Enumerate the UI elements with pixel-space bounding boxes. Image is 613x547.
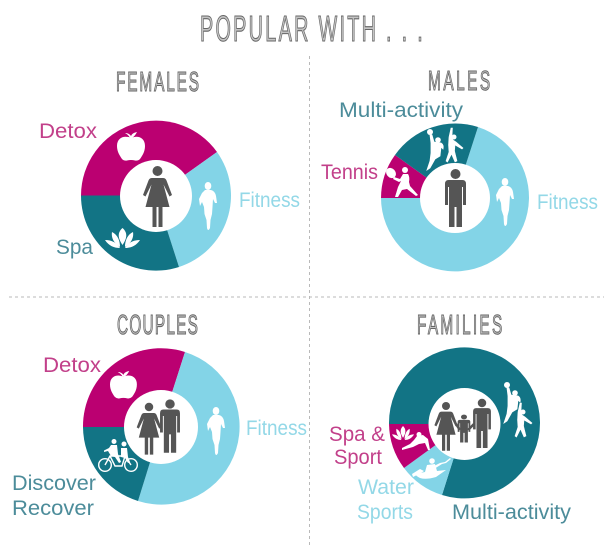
icon: couple (137, 399, 180, 455)
label: fitness: Fitness (537, 191, 598, 214)
label: spa: Spa (56, 236, 93, 259)
label: discover: Discover (12, 472, 96, 495)
label: tennis: Tennis (321, 161, 378, 184)
icon: apple (117, 132, 145, 161)
icon: dancer (515, 403, 532, 437)
heading: families: FAMILIES (417, 309, 502, 340)
icon: lotus (392, 426, 414, 440)
label: fitness: Fitness (239, 189, 300, 212)
icon: runner (207, 407, 225, 455)
label: sports: Sports (357, 501, 413, 524)
panel: males (321, 65, 598, 271)
icon: crouching athlete (402, 432, 430, 450)
icon: tennis player (384, 166, 418, 197)
label: detox: Detox (39, 120, 98, 143)
label: water: Water (358, 476, 414, 499)
donut chart: males (381, 124, 529, 271)
heading: males: MALES (428, 65, 490, 96)
label: multi-activity: Multi-activity (452, 501, 572, 524)
heading: females: FEMALES (116, 66, 199, 97)
icon: runner (496, 178, 514, 226)
panel: families (329, 309, 572, 524)
label: sport: Sport (334, 446, 382, 469)
icon: apple (110, 371, 137, 398)
label: detox: Detox (43, 354, 102, 377)
icon: basketball player (427, 129, 443, 170)
donut chart: families (389, 347, 540, 498)
icon: kayak (412, 458, 451, 479)
icon: family (434, 399, 491, 451)
icon: basketball player (504, 382, 520, 423)
icon: tandem bike (99, 439, 137, 471)
panel: couples (12, 309, 307, 520)
donut chart: couples (83, 348, 240, 505)
label: fitness: Fitness (246, 417, 307, 440)
label: spa and: Spa & (329, 423, 385, 446)
icon: runner (199, 182, 217, 230)
icon: woman (143, 166, 172, 227)
panel: females (39, 66, 300, 271)
icon: man (445, 169, 466, 227)
title: POPULAR WITH . . . (200, 10, 423, 50)
label: multi-activity: Multi-activity (339, 99, 464, 122)
heading: couples: COUPLES (117, 309, 198, 340)
icon: dancer (446, 128, 463, 162)
label: recover: Recover (12, 497, 94, 520)
icon: lotus (105, 228, 140, 248)
donut chart: females (81, 121, 231, 271)
